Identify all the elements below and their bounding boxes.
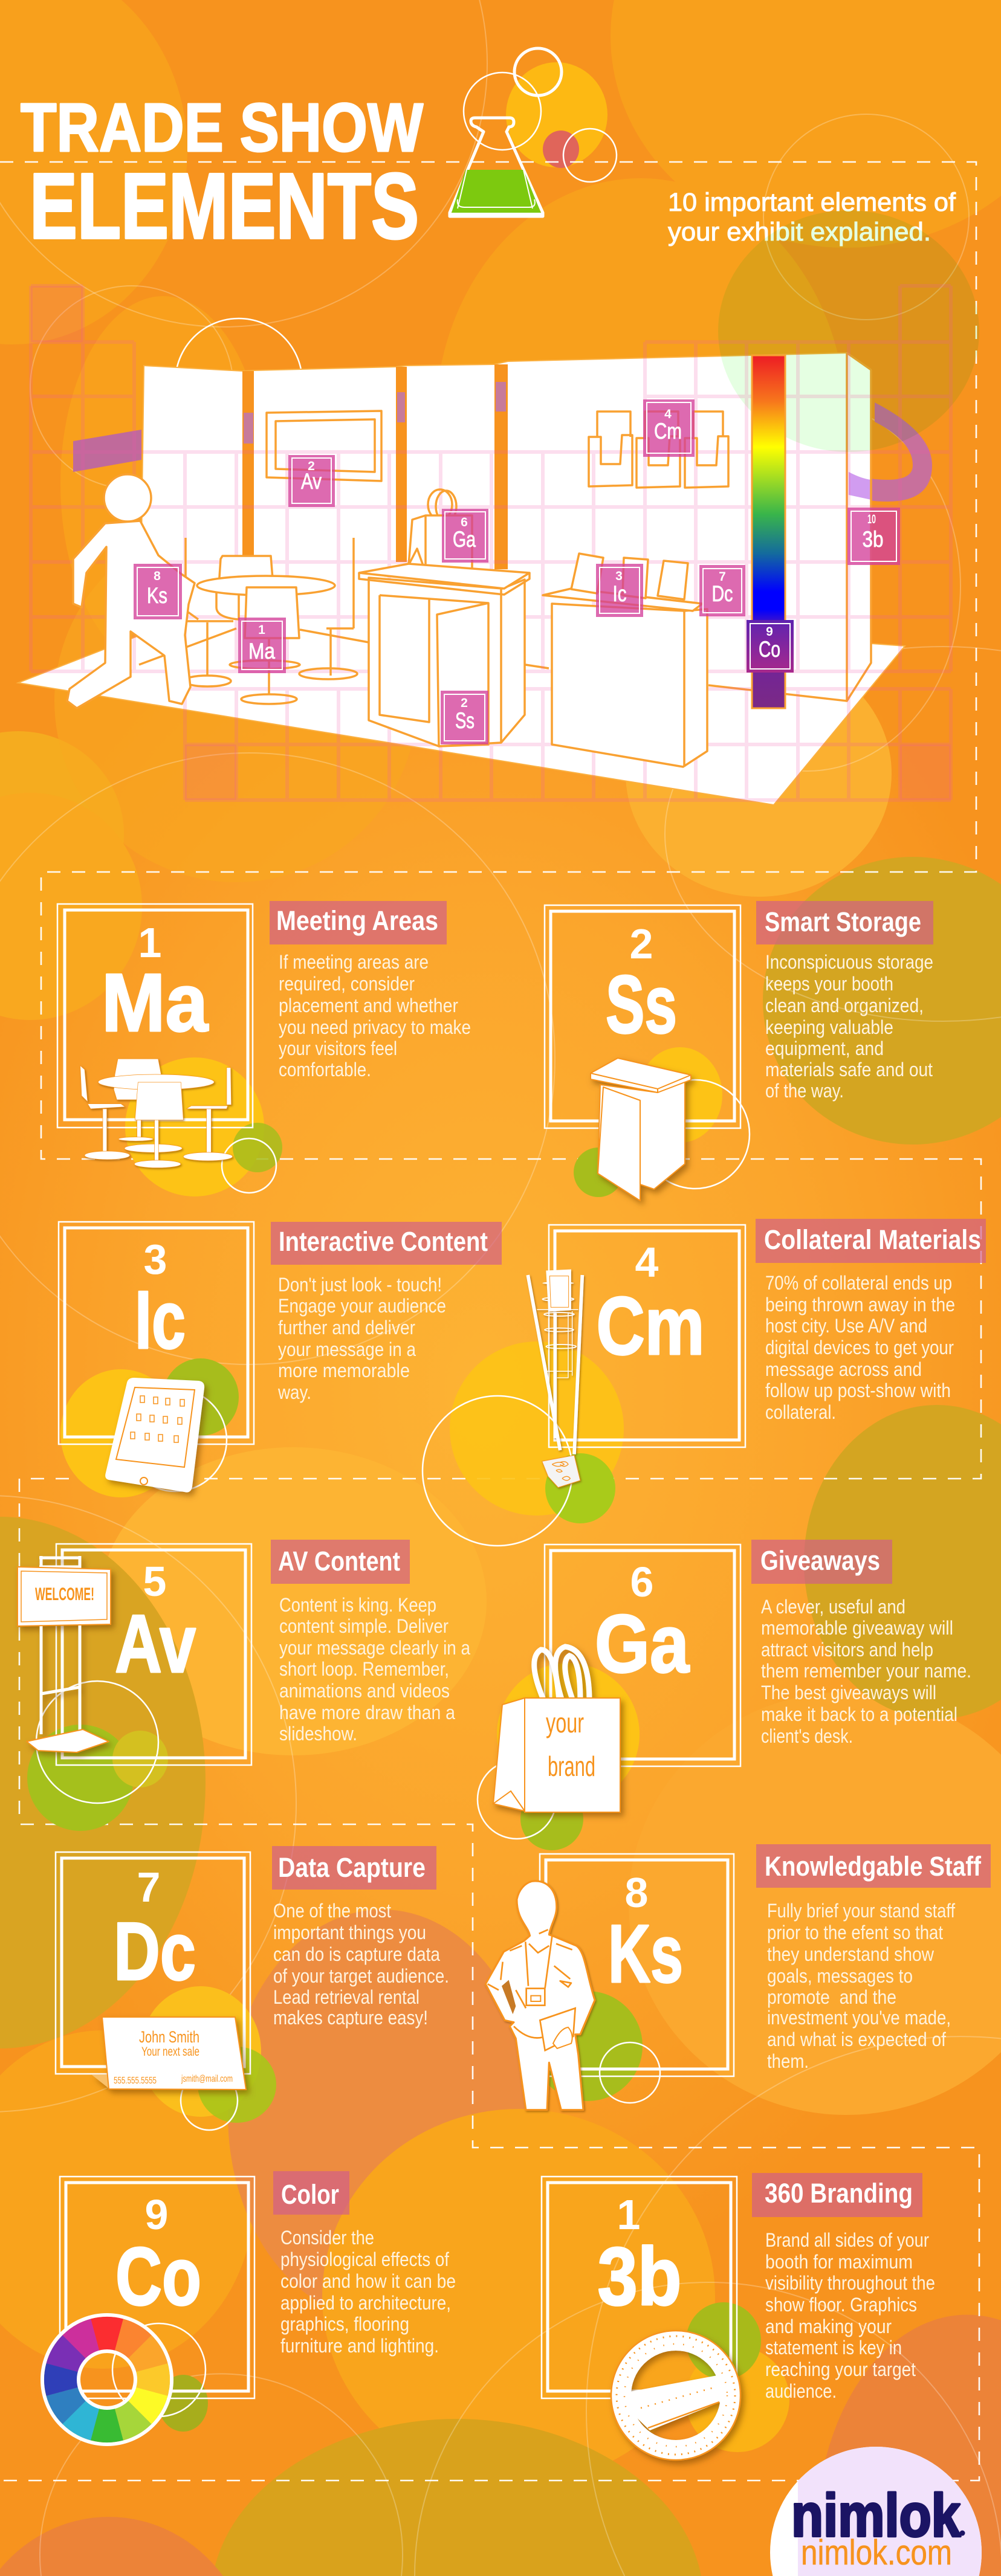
- text block: A clever, useful and: [761, 1596, 905, 1618]
- heading: [752, 2173, 922, 2217]
- text block: make it back to a potential: [761, 1703, 957, 1725]
- element symbol: 4: [635, 1239, 659, 1286]
- tag: Ma: Ma: [248, 639, 275, 663]
- icon: branded bag: your: [546, 1707, 584, 1738]
- text block: more memorable: [278, 1360, 410, 1381]
- text block: [279, 951, 471, 1080]
- element symbol: [596, 1239, 705, 1372]
- heading: [756, 1844, 991, 1888]
- element frame: [542, 2177, 737, 2398]
- tag: Ks: 8: [154, 569, 161, 583]
- icon: 360 ring: [611, 2331, 740, 2460]
- text block: investment you've made,: [767, 2007, 951, 2029]
- panel: Knowledgable Staff: [485, 1844, 991, 2110]
- element symbol: [102, 919, 209, 1048]
- element symbol: [115, 1558, 196, 1690]
- text block: can do is capture data: [273, 1943, 440, 1965]
- tag: Av: Av: [301, 469, 322, 494]
- grid filled cells: [31, 286, 951, 800]
- element symbol: Co: [115, 2230, 201, 2322]
- panel: Color: [42, 2171, 456, 2444]
- element symbol: 3b: [597, 2230, 682, 2322]
- heading: [273, 2171, 349, 2215]
- tag: Ga: Ga: [453, 527, 476, 552]
- subtitle: 10 important elements of: [668, 188, 956, 217]
- text block: 70% of collateral ends up: [765, 1272, 952, 1294]
- text block: [279, 1594, 470, 1745]
- text block: them remember your name.: [761, 1660, 971, 1682]
- text block: [767, 1900, 955, 2072]
- tag: Ks: [134, 564, 182, 619]
- text block: [765, 2229, 935, 2402]
- text block: your message clearly in a: [279, 1637, 470, 1659]
- text block: Fully brief your stand staff: [767, 1900, 955, 1922]
- screen on wall: [267, 411, 381, 481]
- element symbol: [135, 1236, 186, 1366]
- text block: [273, 1900, 449, 2029]
- element frame: [59, 1222, 254, 1444]
- text block: placement and whether: [279, 995, 458, 1016]
- element frame: [540, 1854, 734, 2076]
- icon: welcome kiosk: [18, 1556, 111, 1752]
- text block: clean and organized,: [765, 995, 924, 1016]
- panel: Giveaways: [478, 1540, 971, 1850]
- element symbol: 9: [145, 2191, 168, 2238]
- text block: Engage your audience: [278, 1295, 446, 1317]
- element symbol: Cm: [596, 1280, 705, 1372]
- tag: Co: 9: [766, 625, 773, 639]
- tag: Ma: 1: [258, 623, 265, 637]
- icon: business card: [91, 2017, 246, 2090]
- icon: colour wheel: [42, 2315, 172, 2444]
- tag: Av: [288, 455, 335, 507]
- element frame: [545, 1545, 740, 1766]
- right wraparound ribbon: [849, 402, 932, 502]
- panel: AV Content: [18, 1540, 470, 1831]
- tag: Ss: Ss: [455, 708, 475, 733]
- text block: The best giveaways will: [761, 1682, 936, 1703]
- booth walls and floor: [18, 353, 905, 805]
- text block: Inconspicuous storage: [765, 951, 933, 973]
- tag: Dc: 7: [719, 570, 726, 584]
- tag: Ss: [441, 691, 488, 744]
- text block: and what is expected of: [767, 2029, 946, 2050]
- brochure holders: [589, 412, 728, 488]
- icon: business card: 555.555.5555: [114, 2076, 157, 2086]
- icon: storage cabinet: [591, 1058, 691, 1201]
- text block: being thrown away in the: [765, 1294, 955, 1315]
- accents: [533, 1991, 660, 2103]
- olive blob: [718, 210, 979, 452]
- panel: Data Capture: [56, 1846, 449, 2130]
- text block: [761, 1596, 971, 1747]
- text block: furniture and lighting.: [280, 2335, 439, 2357]
- gift bag on counter: [409, 489, 472, 575]
- icon: branded bag: brand: [548, 1751, 595, 1782]
- icon: literature rack: [528, 1270, 582, 1488]
- text block: [280, 2227, 456, 2357]
- heading: [270, 901, 447, 944]
- text block: reaching your target: [765, 2358, 916, 2380]
- text block: slideshow.: [279, 1723, 357, 1745]
- tag: Cm: Cm: [654, 419, 682, 444]
- icon: staff member: [485, 1881, 595, 2110]
- accents: [125, 1057, 282, 1196]
- text block: goals, messages to: [767, 1965, 913, 1987]
- tag: Av: 2: [308, 459, 315, 473]
- tag: 3b: 3b: [862, 527, 884, 552]
- element symbol: 1: [138, 919, 161, 966]
- text block: physiological effects of: [280, 2248, 449, 2270]
- element symbol: Dc: [114, 1905, 196, 1997]
- text block: [765, 951, 933, 1102]
- heading: Meeting Areas: [276, 905, 438, 936]
- tag: Ic: Ic: [613, 581, 626, 606]
- text block: Don't just look - touch!: [278, 1274, 442, 1296]
- text block: show floor. Graphics: [765, 2294, 917, 2316]
- text block: content simple. Deliver: [279, 1615, 449, 1637]
- heading: 360 Branding: [765, 2178, 913, 2209]
- heading: Interactive Content: [279, 1226, 488, 1257]
- text block: digital devices to get your: [765, 1337, 954, 1358]
- text block: way.: [277, 1381, 311, 1403]
- text block: [765, 1272, 955, 1423]
- text block: have more draw than a: [279, 1702, 455, 1723]
- text block: client's desk.: [761, 1725, 853, 1747]
- accents: [112, 2323, 208, 2432]
- heading: [756, 1219, 986, 1263]
- text block: applied to architecture,: [280, 2292, 451, 2314]
- accents: [478, 1663, 640, 1850]
- text block: they understand show: [767, 1943, 935, 1965]
- accents: [60, 1358, 239, 1497]
- periodic grid: [31, 286, 951, 800]
- element frame: [60, 2177, 254, 2398]
- element frame: [545, 905, 740, 1128]
- element symbol: 6: [630, 1558, 653, 1606]
- icon: business card: John Smith: [139, 2028, 199, 2046]
- tag: Co: [747, 620, 794, 673]
- icon: business card: Your next sale: [141, 2045, 199, 2059]
- icon: welcome kiosk: WELCOME!: [35, 1584, 94, 1604]
- text block: One of the most: [273, 1900, 391, 1922]
- text block: keeps your booth: [765, 973, 893, 995]
- heading: Smart Storage: [765, 906, 921, 937]
- tag: Ga: [442, 509, 488, 563]
- person silhouette: [67, 474, 195, 708]
- text block: Lead retrieval rental: [273, 1986, 420, 2008]
- text block: of your target audience.: [273, 1965, 449, 1987]
- element symbol: [608, 1869, 683, 2000]
- icon: business card: jsmith@mail.com: [181, 2074, 233, 2084]
- subtitle: [668, 188, 956, 247]
- logo: nimlok: nimlok: [791, 2482, 961, 2549]
- tag: 3b: 10: [867, 512, 876, 526]
- logo: nimlok: [770, 2447, 991, 2576]
- accents: [574, 1047, 750, 1197]
- left wraparound band: [73, 430, 141, 472]
- element symbol: 1: [617, 2191, 640, 2238]
- text block: materials safe and out: [765, 1059, 933, 1080]
- element frame: [549, 1225, 745, 1447]
- text block: statement is key in: [765, 2337, 902, 2358]
- element symbol: Ma: [102, 957, 209, 1048]
- element symbol: [115, 2191, 201, 2322]
- element symbol: 5: [143, 1558, 166, 1605]
- element symbol: 8: [625, 1869, 648, 1916]
- heading: [751, 1540, 892, 1584]
- text block: attract visitors and help: [761, 1639, 933, 1661]
- rainbow column: [752, 355, 785, 708]
- panel: Meeting Areas: [57, 901, 471, 1196]
- element symbol: [114, 1864, 196, 1997]
- text block: Brand all sides of your: [765, 2229, 929, 2251]
- element symbol: 7: [137, 1864, 160, 1911]
- storage counter: [359, 564, 530, 746]
- panel: Smart Storage: [545, 901, 933, 1201]
- title: TRADE SHOW: [21, 89, 423, 166]
- heading: Color: [281, 2179, 339, 2210]
- tag: Ks: Ks: [147, 583, 167, 608]
- text block: If meeting areas are: [279, 951, 429, 973]
- logo: nimlok: nimlok.com: [801, 2533, 952, 2572]
- element frame: [56, 1544, 251, 1765]
- tag: Cm: 4: [664, 407, 672, 421]
- panel: Interactive Content: [59, 1222, 502, 1497]
- tag: 3b: [847, 508, 900, 565]
- element symbol: Ga: [595, 1598, 690, 1690]
- element symbol: 2: [630, 920, 653, 967]
- panel: 360 Branding: [542, 2173, 935, 2460]
- element symbol: [606, 920, 677, 1050]
- text block: booth for maximum: [765, 2251, 913, 2273]
- heading: Data Capture: [278, 1852, 426, 1883]
- tag: Cm: [643, 399, 695, 457]
- text block: [277, 1274, 446, 1403]
- text block: color and how it can be: [280, 2270, 456, 2292]
- element symbol: 3: [144, 1236, 167, 1283]
- text block: and making your: [765, 2316, 892, 2337]
- text block: makes capture easy!: [273, 2007, 428, 2029]
- text block: promote and the: [767, 1986, 896, 2008]
- tag: Ic: [596, 564, 643, 617]
- text block: them.: [767, 2050, 809, 2072]
- element symbol: [597, 2191, 682, 2322]
- text block: memorable giveaway will: [761, 1617, 953, 1639]
- text block: follow up post-show with: [765, 1380, 951, 1401]
- tag: Co: Co: [759, 637, 780, 662]
- tag: Dc: Dc: [712, 581, 733, 606]
- accents: [27, 1681, 168, 1831]
- title: [21, 89, 423, 258]
- text block: you need privacy to make: [279, 1016, 471, 1038]
- text block: collateral.: [765, 1401, 836, 1423]
- text block: important things you: [273, 1922, 426, 1943]
- text block: Consider the: [280, 2227, 374, 2248]
- text block: your message in a: [278, 1338, 416, 1360]
- icon: table and chairs: [80, 1059, 233, 1168]
- text block: short loop. Remember,: [279, 1658, 449, 1680]
- icon: branded bag: [493, 1647, 620, 1812]
- text block: prior to the efent so that: [767, 1922, 943, 1943]
- text block: comfortable.: [279, 1059, 371, 1080]
- icon: flask: [450, 118, 543, 216]
- title: ELEMENTS: [30, 154, 419, 258]
- element frame: [57, 904, 253, 1128]
- heading: [271, 1540, 410, 1584]
- text block: audience.: [765, 2380, 837, 2402]
- text block: of the way.: [765, 1080, 844, 1102]
- text block: Content is king. Keep: [279, 1594, 436, 1616]
- text block: animations and videos: [279, 1680, 450, 1702]
- heading: [756, 901, 933, 944]
- text block: your visitors feel: [279, 1038, 397, 1059]
- tag: Ss: 2: [461, 696, 468, 710]
- element symbol: Ic: [135, 1274, 186, 1366]
- element symbol: [595, 1558, 690, 1690]
- heading: Giveaways: [760, 1545, 880, 1576]
- text block: host city. Use A/V and: [765, 1315, 927, 1337]
- text block: further and deliver: [278, 1317, 415, 1338]
- heading: AV Content: [278, 1546, 400, 1577]
- text block: visibility throughout the: [765, 2272, 935, 2294]
- element frame: [56, 1852, 250, 2074]
- booth arc: [175, 318, 302, 445]
- element symbol: Ss: [606, 958, 677, 1050]
- text block: message across and: [765, 1358, 922, 1380]
- heading: [271, 1222, 502, 1265]
- icon: tablet: [105, 1378, 204, 1493]
- accents: [685, 2302, 789, 2452]
- panel: Collateral Materials: [423, 1219, 986, 1546]
- tag: Ga: 6: [461, 515, 468, 529]
- tag: Ic: 3: [615, 569, 623, 583]
- heading: [272, 1846, 436, 1890]
- display counter: [543, 554, 707, 767]
- text block: required, consider: [279, 973, 415, 995]
- element symbol: Av: [115, 1598, 196, 1690]
- tag: Ma: [238, 618, 286, 673]
- chairs and table: [183, 538, 357, 704]
- text block: equipment, and: [765, 1038, 884, 1059]
- text block: keeping valuable: [765, 1016, 893, 1038]
- booth illustration: [18, 210, 979, 805]
- element symbol: Ks: [608, 1908, 683, 2000]
- accents: [423, 1341, 624, 1546]
- flask accents: [464, 48, 617, 182]
- tag: Dc: [699, 565, 745, 616]
- subtitle: your exhibit explained.: [668, 218, 931, 247]
- text block: graphics, flooring: [280, 2313, 409, 2335]
- accents: [140, 1986, 276, 2130]
